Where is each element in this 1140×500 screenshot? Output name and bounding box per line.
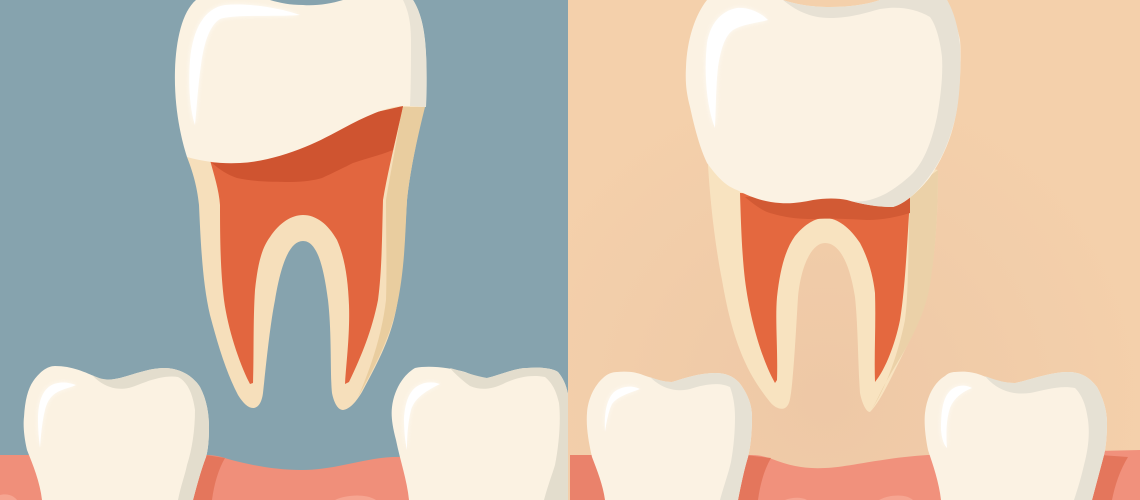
crown highlight glow xyxy=(189,5,300,125)
highlight glow xyxy=(941,386,972,448)
small tooth: right panel, second xyxy=(925,372,1107,500)
highlight xyxy=(605,387,640,432)
highlight xyxy=(941,386,972,448)
pulp chamber and canals xyxy=(210,106,403,384)
shaded edge xyxy=(92,368,209,500)
gum: right panel xyxy=(568,450,1140,500)
small tooth: right panel, first xyxy=(587,372,752,500)
pulp shadow band xyxy=(745,190,910,220)
crown highlight glow xyxy=(706,8,768,128)
shaded edge xyxy=(650,373,752,500)
large tooth: left panel xyxy=(175,0,427,410)
highlight glow xyxy=(38,382,76,448)
root shaded side xyxy=(358,107,425,397)
large tooth: right panel xyxy=(686,0,961,412)
small tooth: left panel, first xyxy=(24,366,209,500)
crown highlight xyxy=(706,8,768,128)
crown xyxy=(686,0,961,207)
root shaded side xyxy=(870,170,938,412)
shaded edge xyxy=(450,368,570,500)
highlight xyxy=(404,382,440,450)
highlight xyxy=(38,382,76,448)
pulp chamber and canals xyxy=(740,190,910,383)
root dentin xyxy=(187,100,424,410)
crown highlight xyxy=(189,5,300,125)
highlight glow xyxy=(404,382,440,450)
panel: right peach background xyxy=(568,0,1140,500)
crown xyxy=(175,0,427,163)
gum: left panel xyxy=(0,455,409,500)
panel: left blue-grey background xyxy=(0,0,568,500)
crown shaded edge xyxy=(783,0,960,207)
small tooth: left panel, second xyxy=(392,367,570,500)
root dentin xyxy=(708,150,938,412)
shaded edge xyxy=(985,372,1107,500)
pulp shadow band xyxy=(212,106,403,182)
highlight glow xyxy=(605,387,640,432)
crown shaded edge xyxy=(403,0,426,107)
